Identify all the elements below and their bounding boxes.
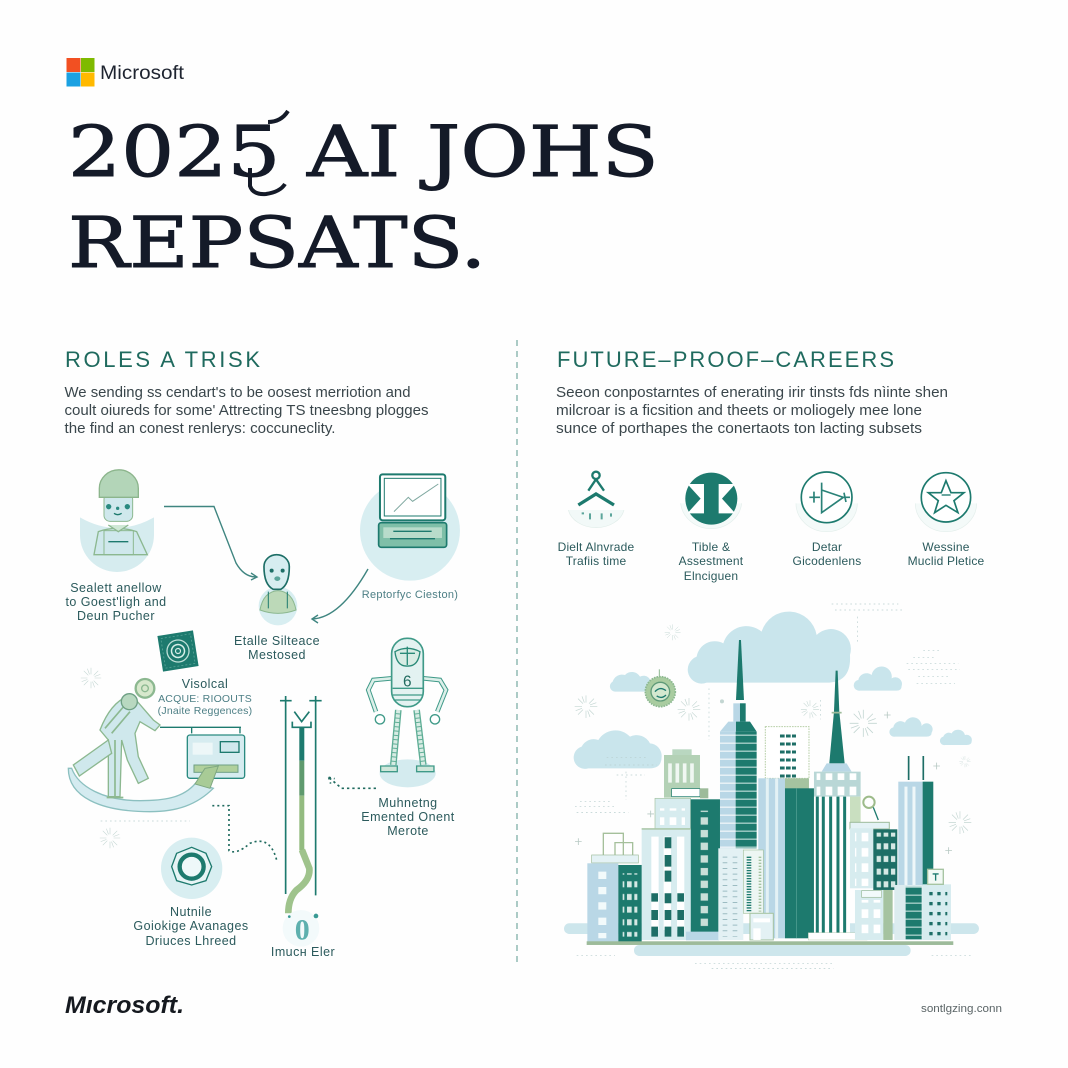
heading: roles a trisk: ROLES A TRISK — [65, 347, 260, 372]
icon: laptop — [360, 474, 460, 581]
heading: future-proof careers: FUTURE–PROOF–CAREERS — [557, 347, 894, 372]
icon row — [558, 472, 985, 583]
icon: gear medallion — [645, 669, 675, 707]
icon: circuit circle — [796, 472, 857, 532]
ground strip — [587, 941, 953, 945]
illustration: vertical gauge tool: 0 — [295, 913, 310, 946]
faint data specks — [575, 604, 973, 969]
logo: Microsoft — [66, 58, 185, 86]
label: central person: Mestosed — [248, 648, 306, 662]
text block: right intro: sunce of porthapes the conertaots ton lacting subsets — [556, 420, 922, 437]
label: nut ring: Driuces Lhreed — [145, 934, 237, 948]
label: icon one: Trafiis time — [566, 554, 626, 568]
illustration: city skyline — [564, 604, 979, 969]
right buildings — [850, 756, 951, 940]
label: icon three: Gicodenlens — [793, 554, 861, 568]
label: nut ring: Nutnile — [170, 905, 212, 919]
label: gauge: Imucн Eler — [271, 945, 335, 959]
label: robot: Muhnetng — [378, 796, 438, 810]
arrow: person to centre — [164, 506, 257, 580]
icon: central person — [259, 555, 297, 625]
label: visual acquire — [158, 677, 252, 717]
title — [68, 111, 659, 284]
label: icon two: Tible & — [692, 540, 730, 554]
label: icon three — [793, 540, 861, 568]
icon: person with helmet — [80, 470, 154, 572]
label: visual acquire: ACQUE: RIOOUTS — [158, 693, 252, 705]
label: person one: Sealett anellow — [70, 581, 162, 595]
label: person one — [65, 581, 167, 623]
label: visual acquire: Visolcal — [182, 677, 228, 691]
icon: hierarchy chevron — [568, 472, 624, 528]
label: robot: Emented Onent — [361, 810, 455, 824]
text block: right intro: Seeon conpostarntes of enerating irir tinsts fds nìinte shen — [556, 384, 948, 401]
icon: star circle — [915, 473, 977, 532]
illustration: worker at machine — [68, 679, 245, 812]
arrow: dotted robot to tool — [329, 777, 376, 788]
text block: right intro — [556, 384, 948, 437]
label: visual acquire: (Jnaite Reggences) — [158, 705, 252, 717]
clouds — [574, 612, 972, 769]
icon: faint sparkle left — [81, 668, 101, 688]
title: 2025 AI JOHS — [68, 111, 659, 193]
icon: green square badge — [157, 630, 199, 672]
label: icon one: Dielt Alnvrade — [558, 540, 635, 554]
text block: left intro: We sending ss cendart's to be oosest merriotion and — [64, 384, 410, 401]
illustration: vertical gauge tool — [280, 696, 322, 947]
illustration: robot — [368, 638, 446, 787]
label: laptop: Reptorfyc Cieston) — [362, 589, 458, 601]
label: central person — [234, 634, 320, 662]
faint divider dots — [101, 820, 190, 822]
divider — [516, 340, 518, 966]
illustration: robot: 6 — [403, 674, 412, 691]
panel: future-proof careers — [556, 347, 985, 969]
footer logo: Mıcrosoft. — [65, 992, 184, 1019]
tall tower — [720, 640, 757, 848]
ground shapes — [564, 923, 979, 956]
label: robot: Merote — [387, 824, 429, 838]
icon: nut ring — [161, 838, 222, 899]
label: icon four: Muclid Pletice — [908, 554, 985, 568]
white windowed building — [765, 727, 809, 778]
panel: roles at risk — [64, 347, 460, 959]
mid blocks — [758, 778, 814, 938]
title: REPSATS. — [68, 202, 486, 284]
arrow: dotted worker to tool — [212, 806, 277, 860]
text block: left intro — [64, 384, 428, 437]
label: icon four — [908, 540, 985, 568]
text block: left intro: coult oiureds for some' Attrecting TS tneesbng plogges — [64, 402, 428, 419]
arrow: laptop to centre — [312, 569, 368, 623]
label: central person: Etalle Silteace — [234, 634, 320, 648]
icon: faint sparkle lower — [100, 828, 120, 848]
left buildings — [587, 749, 720, 942]
label: icon four: Wessine — [922, 540, 970, 554]
icon: teal hourglass disc — [681, 473, 742, 529]
centre low buildings — [718, 848, 773, 940]
label: icon three: Detar — [812, 540, 842, 554]
sparkles — [575, 624, 971, 854]
label: robot — [361, 796, 455, 838]
label: icon two: Assestment — [679, 554, 744, 568]
label: icon two: Elnciguen — [684, 569, 738, 583]
label: person one: to Goest'ligh and — [65, 595, 167, 609]
text block: right intro: milcroar is a ficsition and theets or moliogely mee lone — [556, 402, 922, 419]
tower two — [808, 671, 867, 940]
label: icon one — [558, 540, 635, 568]
logo: Microsoft: Microsoft — [100, 63, 185, 84]
label: icon two — [679, 540, 744, 583]
footer url: sontlgzing.conn — [921, 1003, 1002, 1015]
label: person one: Deun Pucher — [77, 609, 155, 623]
label: nut ring — [133, 905, 249, 948]
text block: left intro: the find an conest renlerys: coccuneclity. — [64, 420, 336, 437]
label: nut ring: Goiokige Avanages — [133, 919, 249, 933]
